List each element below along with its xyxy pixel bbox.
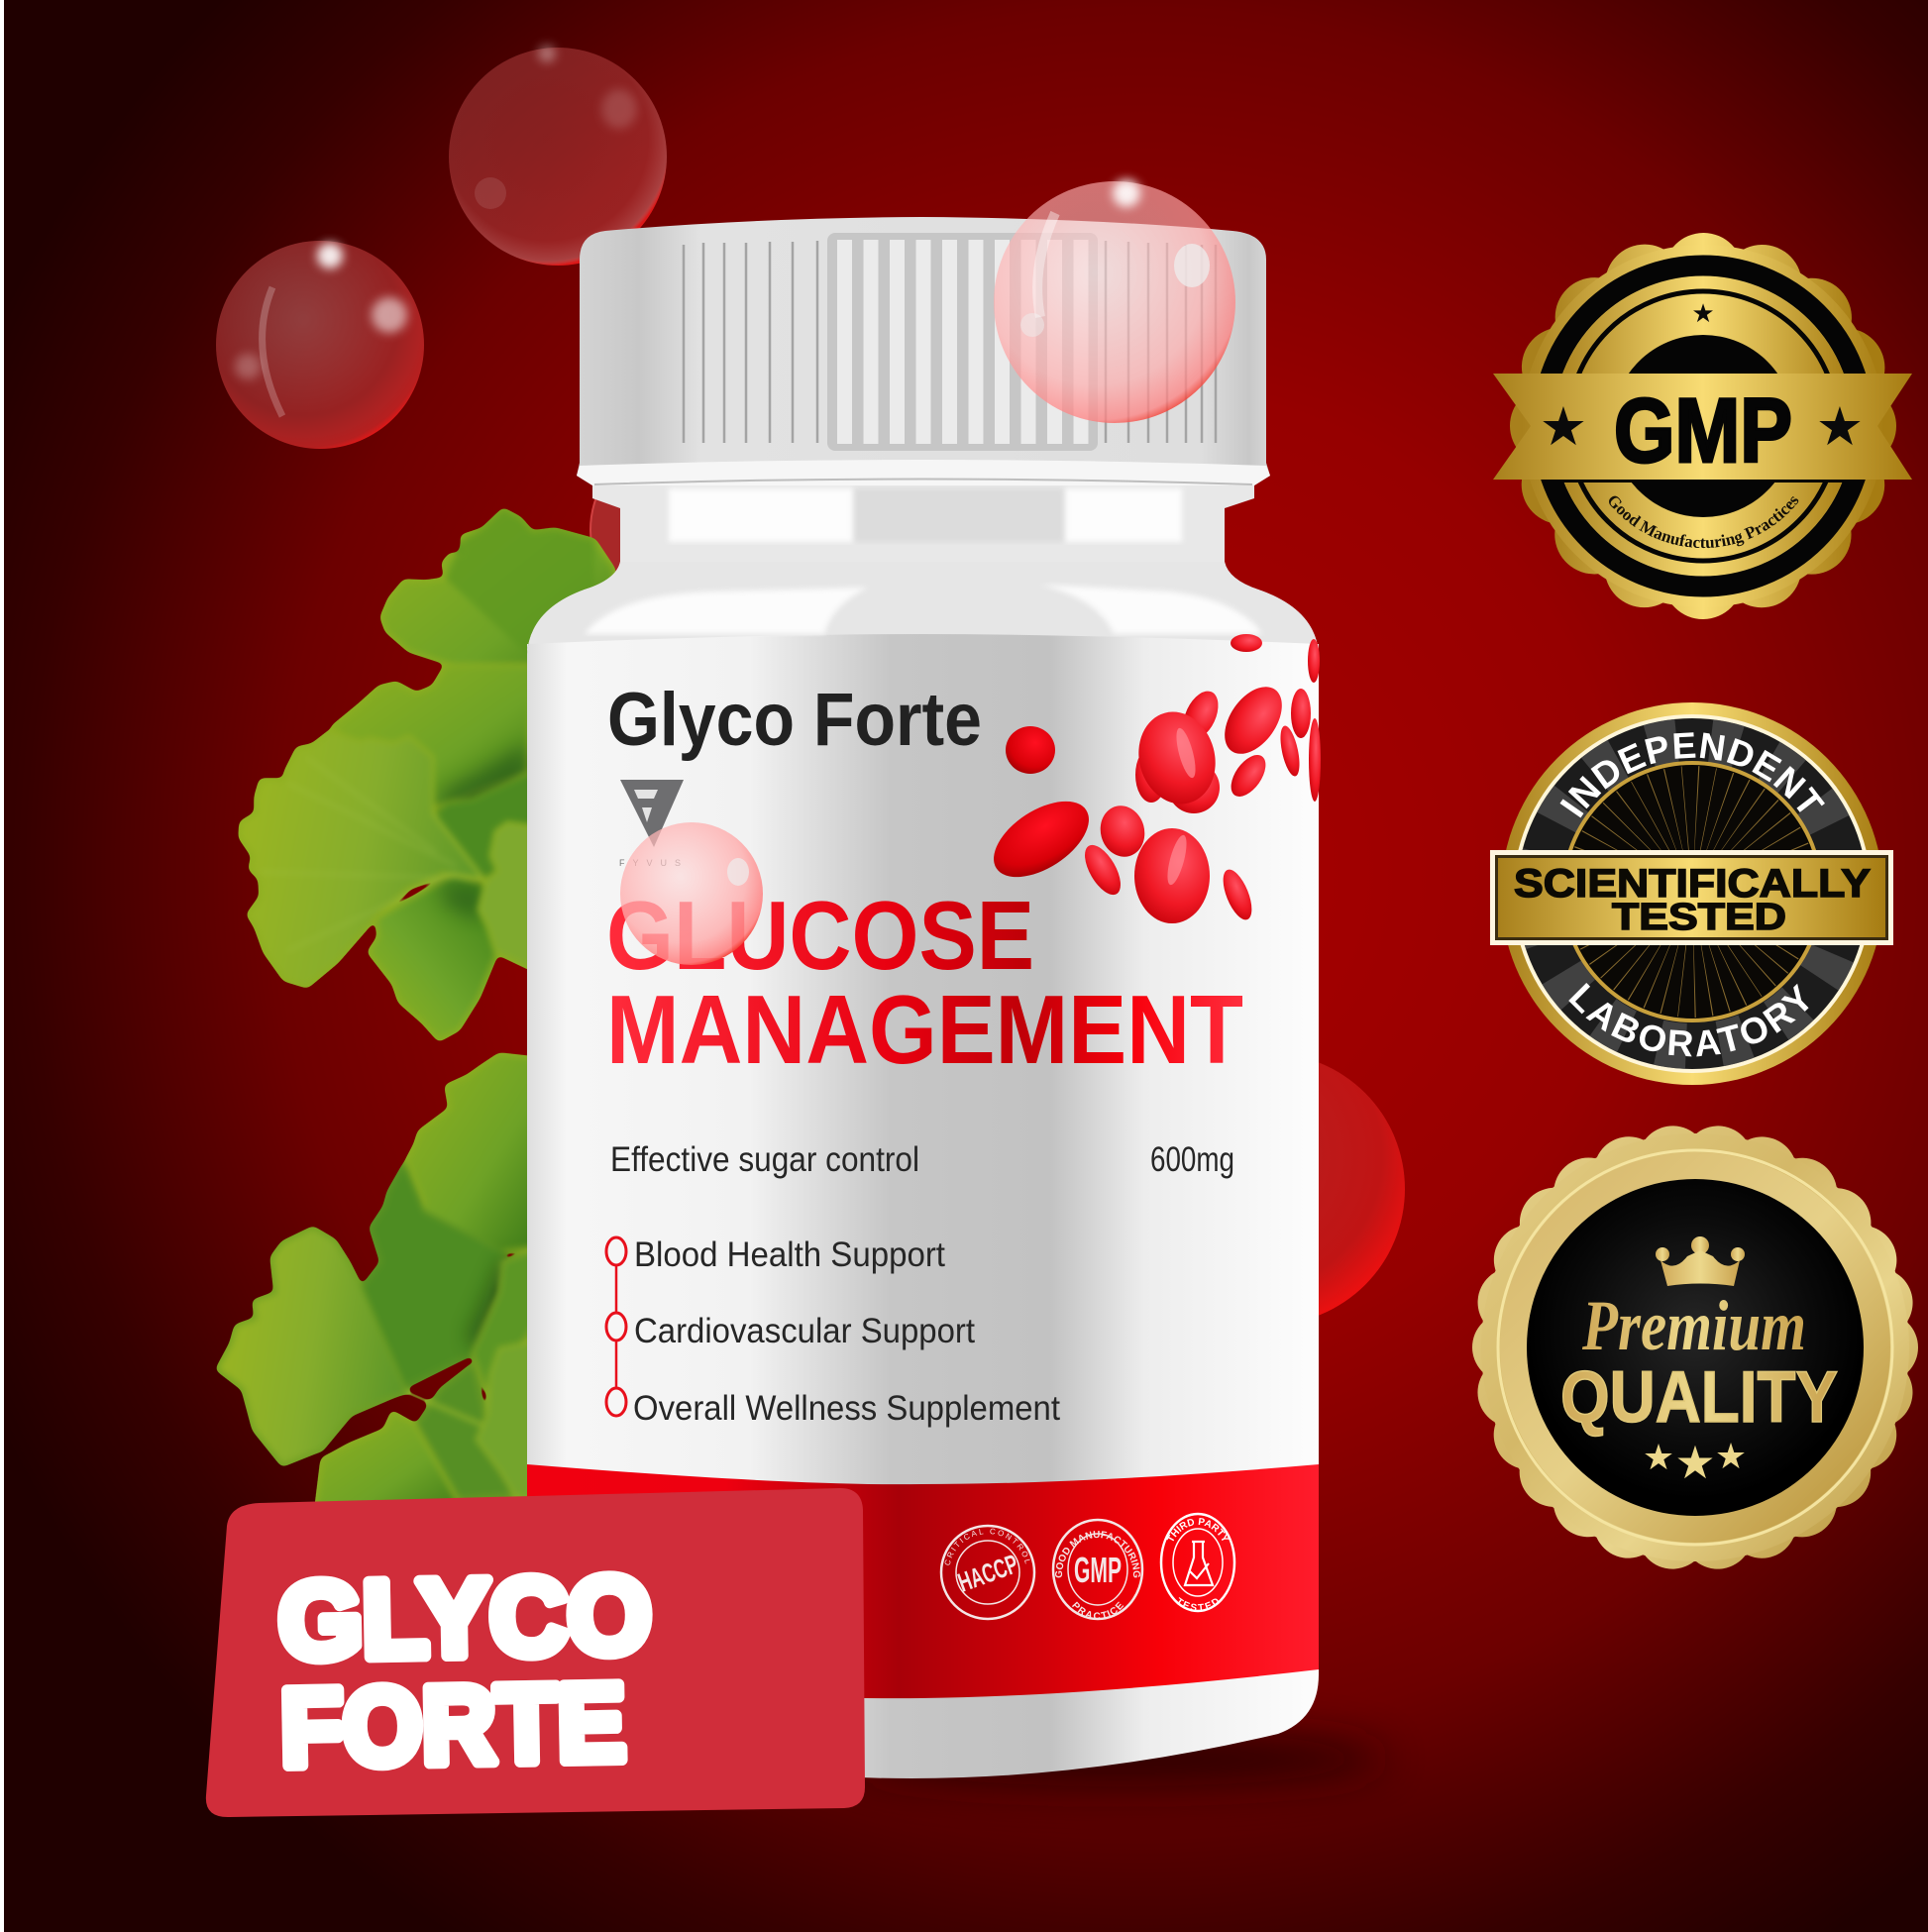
banner text: TESTED bbox=[1612, 897, 1786, 938]
mini badge: GMP: PRACTICE bbox=[1072, 1601, 1124, 1618]
headline bbox=[606, 881, 1243, 1084]
cap bbox=[577, 217, 1270, 485]
premium: Premium bbox=[1581, 1286, 1806, 1365]
red card bbox=[206, 1488, 865, 1817]
mini badge: HACCP: CRITICAL CONTROL bbox=[945, 1528, 1030, 1565]
card title: GLYCO bbox=[277, 1554, 652, 1682]
stars: ★ bbox=[1643, 1438, 1674, 1478]
scalloped gold seal bbox=[1481, 1133, 1909, 1561]
red band bbox=[527, 1464, 1319, 1698]
benefit list: Blood Health Support bbox=[634, 1235, 945, 1274]
bubble: over headline bbox=[620, 822, 763, 965]
scalloped gold seal bbox=[1522, 245, 1884, 607]
bubble: behind bottle right bbox=[1133, 1053, 1405, 1325]
bubble: left bbox=[216, 241, 424, 449]
bottle body bbox=[527, 562, 1319, 1778]
arc text: Good Manufacturing Practices bbox=[1609, 495, 1799, 549]
stars: ribbon: ★ bbox=[1540, 395, 1587, 458]
arc: LABORATORY: LABORATORY bbox=[1568, 983, 1809, 1056]
brand name: Glyco Forte bbox=[607, 678, 982, 762]
mini badge: GMP bbox=[1052, 1518, 1143, 1621]
leaf: lower right bottom bbox=[477, 1342, 535, 1501]
mini badge: third party tested: TESTED bbox=[1177, 1597, 1219, 1610]
logo: Fyvus bbox=[619, 780, 689, 868]
leaf: lower middle bbox=[362, 1164, 515, 1389]
mini badge: third party tested: THIRD PARTY bbox=[1167, 1518, 1229, 1542]
card title bbox=[277, 1554, 652, 1789]
headline: MANAGEMENT bbox=[606, 975, 1243, 1084]
cap ridges bbox=[684, 233, 1216, 451]
badge: GMP bbox=[1493, 233, 1912, 619]
benefit list: Cardiovascular Support bbox=[634, 1312, 975, 1350]
GMP title: GMP bbox=[1614, 380, 1792, 482]
bottle neck bbox=[592, 485, 1254, 575]
mini badge: HACCP bbox=[939, 1524, 1036, 1621]
cap lip bbox=[577, 460, 1270, 485]
dosage: 600mg bbox=[1150, 1140, 1234, 1179]
blood cells graphic bbox=[981, 634, 1321, 923]
banner bbox=[1490, 850, 1893, 945]
leaf: lower big fan bbox=[217, 1228, 482, 1465]
leaf: lower bottom bbox=[315, 1412, 466, 1516]
stars bbox=[1643, 1436, 1747, 1489]
leaf: lower bottom back bbox=[417, 1364, 512, 1498]
bubble: top left large bbox=[449, 45, 667, 266]
badge: premium quality bbox=[1481, 1133, 1909, 1561]
logo: Fyvus: FYVUS bbox=[619, 858, 689, 868]
star: top: ★ bbox=[1691, 299, 1715, 329]
quality: QUALITY bbox=[1560, 1357, 1838, 1438]
mini badge: HACCP: HACCP bbox=[954, 1549, 1022, 1598]
stars: ribbon bbox=[1540, 395, 1864, 458]
ribbon bbox=[1493, 374, 1912, 480]
headline: GLUCOSE bbox=[606, 881, 1034, 990]
banner text: SCIENTIFICALLY bbox=[1514, 862, 1871, 906]
bubble: behind neck bbox=[590, 436, 779, 624]
leaf: lower top bbox=[406, 1054, 535, 1257]
bottle bbox=[527, 217, 1319, 1778]
leaf: upper top bbox=[381, 509, 614, 694]
mini badge: third party tested bbox=[1159, 1512, 1236, 1613]
leaf: right mid bbox=[436, 771, 535, 878]
arc: INDEPENDENT: INDEPENDENT bbox=[1559, 732, 1825, 818]
mini badge: GMP: GMP bbox=[1074, 1550, 1122, 1590]
stars: ribbon: ★ bbox=[1816, 395, 1864, 458]
crown icon bbox=[1656, 1236, 1745, 1286]
leaf: lower lobe bbox=[369, 876, 497, 1040]
badge: independent laboratory bbox=[1490, 702, 1893, 1085]
bottle shadow bbox=[852, 1731, 1387, 1786]
stars: ★ bbox=[1715, 1437, 1747, 1477]
leaf: right small bbox=[479, 822, 535, 971]
ginkgo leaves bbox=[217, 509, 614, 1516]
leaf: big fan bbox=[240, 731, 483, 987]
leaf: lower right bbox=[473, 1250, 535, 1392]
leaf: upper middle bbox=[332, 665, 535, 806]
mini badge: GMP: GOOD MANUFACTURING bbox=[1055, 1531, 1140, 1577]
bubble: over cap bbox=[994, 179, 1235, 423]
banner text bbox=[1514, 862, 1871, 938]
sunburst rays bbox=[1618, 817, 1767, 966]
benefit list: Overall Wellness Supplement bbox=[633, 1389, 1060, 1428]
tagline: Effective sugar control bbox=[610, 1140, 919, 1179]
card title: FORTE bbox=[279, 1662, 626, 1789]
benefit list bbox=[606, 1235, 1060, 1428]
shoulder bbox=[527, 562, 1319, 654]
stars: ★ bbox=[1674, 1436, 1716, 1489]
